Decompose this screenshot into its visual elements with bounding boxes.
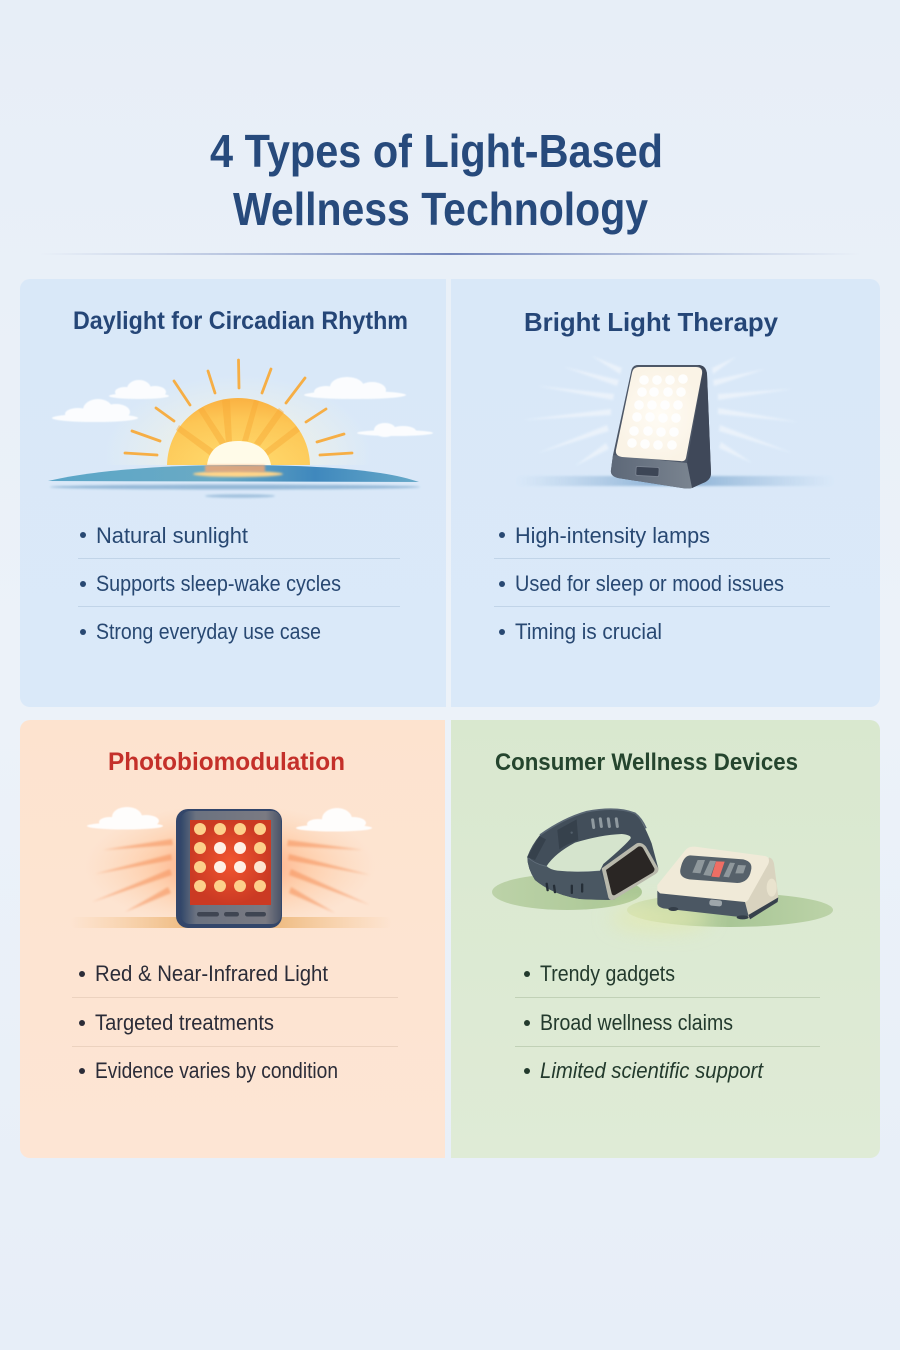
bullet list: consumer wellness devices xyxy=(515,961,820,1083)
title: 4 Types of Light-Based xyxy=(210,125,663,177)
bullet list: consumer wellness devices: Broad wellness claims xyxy=(540,1010,733,1035)
bullet list: bright light therapy: Timing is crucial xyxy=(515,619,662,644)
bullet list: photobiomodulation: Targeted treatments xyxy=(95,1010,274,1035)
bullet list: bright light therapy xyxy=(494,523,830,644)
heading: daylight: Daylight for Circadian Rhythm xyxy=(73,307,408,335)
bullet list: daylight xyxy=(78,523,400,644)
icon: red light panel xyxy=(70,804,392,928)
bullet list: daylight: Strong everyday use case xyxy=(96,619,321,644)
title: Wellness Technology xyxy=(233,183,648,235)
bullet list: consumer wellness devices: Trendy gadgets xyxy=(540,961,675,986)
title xyxy=(210,125,663,235)
panel: consumer wellness devices xyxy=(451,720,880,1158)
bullet list: photobiomodulation xyxy=(72,961,398,1083)
bullet list: photobiomodulation: Evidence varies by condition xyxy=(95,1058,338,1083)
bullet list: consumer wellness devices: Limited scientific support xyxy=(540,1058,764,1083)
bullet list: photobiomodulation: Red & Near-Infrared Light xyxy=(95,961,328,986)
icon: rising sun over water xyxy=(48,358,433,499)
wristband xyxy=(527,809,658,900)
base device xyxy=(657,847,778,919)
panel: bright light therapy xyxy=(451,279,880,707)
bullet list: bright light therapy: High-intensity lamps xyxy=(515,523,710,548)
bullet list: daylight: Supports sleep-wake cycles xyxy=(96,571,341,596)
icon: wristband and base device xyxy=(492,809,833,931)
panel: daylight for circadian rhythm xyxy=(20,279,446,707)
bullet list: daylight: Natural sunlight xyxy=(96,523,248,548)
panel: photobiomodulation xyxy=(20,720,445,1158)
icon: light therapy lamp xyxy=(515,356,835,488)
heading: photobiomodulation: Photobiomodulation xyxy=(108,748,345,776)
bullet list: bright light therapy: Used for sleep or mood issues xyxy=(515,571,784,596)
heading: consumer wellness devices: Consumer Wellness Devices xyxy=(495,749,798,776)
infographic canvas xyxy=(20,134,880,1158)
heading: bright light therapy: Bright Light Therapy xyxy=(524,307,779,337)
